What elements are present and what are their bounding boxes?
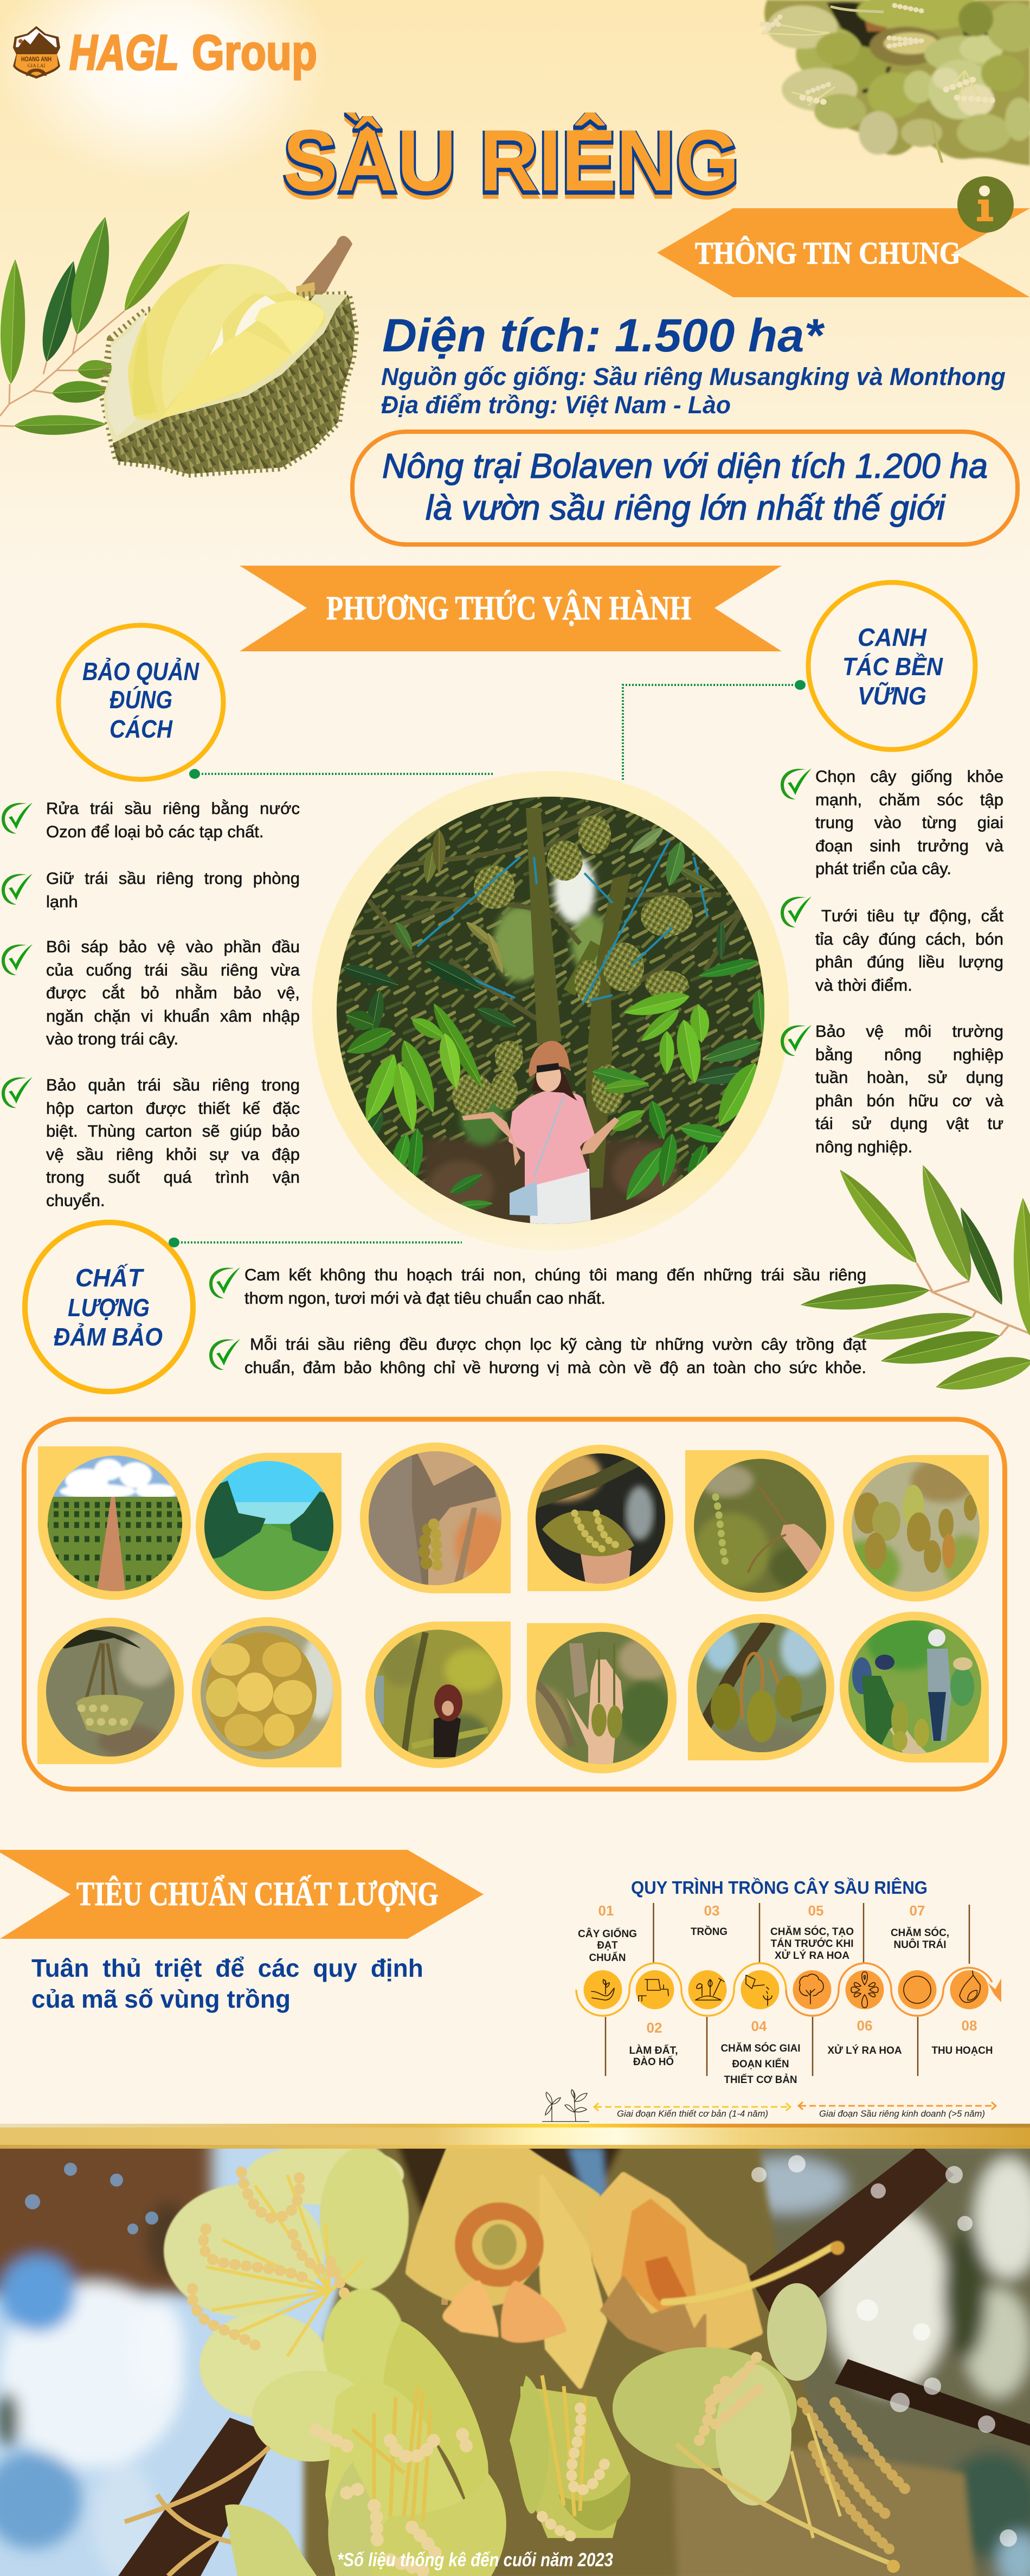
text: tưới tiêu: Tưới tiêu tự động, cắt bbox=[821, 906, 1003, 925]
illustration: durian leaves right bbox=[799, 1160, 1030, 1399]
heading: Quy trình: QUY TRÌNH TRỒNG CÂY SẦU RIÊNG bbox=[631, 1877, 928, 1898]
text: bôi sáp: Bôi sáp bảo vệ vào phần đầu bbox=[46, 937, 300, 956]
icon: info circle bbox=[957, 176, 1014, 233]
text: giữ trái: Giữ trái sầu riêng trong phòng bbox=[46, 869, 300, 888]
golden divider band bbox=[0, 2124, 1030, 2149]
text: tưới tiêu: phân đúng liều lượng bbox=[815, 952, 1003, 971]
photo ring bbox=[312, 771, 789, 1251]
panel: Chất lượng circle: ĐẢM BẢO bbox=[54, 1323, 163, 1351]
connector: right dotted line bbox=[623, 680, 806, 780]
text: bảo vệ môi trường: Bảo vệ môi trường bbox=[815, 1022, 1003, 1041]
photo card 4: buds on hand bbox=[526, 1445, 673, 1591]
text: rửa trái: Rửa trái sầu riêng bằng nước bbox=[46, 799, 300, 818]
text: bôi sáp: ngăn chặn vi khuẩn xâm nhập bbox=[46, 1007, 300, 1025]
banner: TIÊU CHUẨN CHẤT LƯỢNG bbox=[0, 1850, 484, 1939]
arrow: phase 1 bbox=[594, 2103, 790, 2111]
step labels: CHUẨN bbox=[589, 1952, 626, 1964]
text: bảo quản carton: hộp carton được thiết kế đặc bbox=[46, 1099, 300, 1117]
icon: flower bbox=[851, 1972, 878, 2008]
connector: bottom dotted line bbox=[169, 1238, 462, 1247]
photo card 8: yellow flowers bbox=[192, 1617, 342, 1767]
banner: PHƯƠNG THỨC VẬN HÀNH: PHƯƠNG THỨC VẬN HÀNH bbox=[326, 590, 691, 627]
flower: orange right bbox=[591, 2176, 845, 2370]
step numbers: 02 bbox=[647, 2020, 662, 2036]
step labels: ĐẠT bbox=[597, 1940, 618, 1951]
text: bảo quản carton bbox=[46, 1075, 300, 1210]
photo card 11: durian fruits on branch bbox=[688, 1614, 834, 1760]
illustration: durian leaves left bbox=[0, 204, 199, 435]
callout: Nông trại Bolaven bbox=[352, 432, 1018, 544]
step labels: CHĂM SÓC, bbox=[891, 1927, 949, 1939]
step labels: CÂY GIỐNG bbox=[578, 1928, 637, 1940]
text: bảo quản carton: biệt. Thùng carton sẽ giúp bảo bbox=[46, 1122, 300, 1140]
text: cam kết: Cam kết không thu hoạch trái non, chúng tôi mang đến những trái sầu riêng bbox=[244, 1265, 866, 1284]
circle label: CANH TÁC BỀN VỮNG: VỮNG bbox=[858, 682, 926, 710]
text: Tuân thủ triệt để: của mã số vùng trồng bbox=[31, 1985, 291, 2013]
icon: durian half bbox=[960, 1971, 980, 2002]
timeline: planting process bbox=[576, 1902, 1001, 2086]
photo card 2: green rows bbox=[196, 1453, 342, 1600]
text: cam kết bbox=[244, 1265, 866, 1308]
icon: durian outline bbox=[904, 1976, 931, 2003]
text: chọn cây giống: phát triển của cây. bbox=[815, 859, 951, 878]
text: tưới tiêu: tỉa cây đúng cách, bón bbox=[815, 930, 1003, 948]
step labels: NUÔI TRÁI bbox=[893, 1939, 947, 1951]
circle label: CANH TÁC BỀN VỮNG bbox=[808, 582, 975, 749]
panel: photo gallery bbox=[24, 1419, 1005, 1789]
photo card 5: hand holding buds bbox=[685, 1450, 834, 1601]
title: SẦU RIÊNG: SẦU RIÊNG bbox=[283, 112, 739, 209]
caption: phase 2: Giai đoạn Sầu riêng kinh doanh (>5 năm) bbox=[819, 2109, 985, 2119]
text: tưới tiêu: và thời điểm. bbox=[815, 975, 912, 995]
step labels: LÀM ĐẤT, bbox=[629, 2045, 678, 2056]
text: chọn cây giống: Chọn cây giống khỏe bbox=[815, 767, 1003, 786]
step labels: TÁN TRƯỚC KHI bbox=[771, 1938, 853, 1950]
text: rửa trái bbox=[46, 799, 300, 841]
photo: woman in durian orchard bbox=[331, 792, 770, 1231]
step numbers: 05 bbox=[808, 1902, 823, 1919]
icon: tree bbox=[800, 1974, 823, 2004]
text: bảo vệ môi trường: tuần hoàn, sử dụng bbox=[815, 1068, 1003, 1087]
text: bảo quản carton: chuyển. bbox=[46, 1191, 105, 1209]
icon: hand and sprout bbox=[591, 1979, 614, 2000]
step numbers: 04 bbox=[751, 2018, 767, 2034]
step labels: XỬ LÝ RA HOA bbox=[827, 2045, 902, 2056]
step numbers: 08 bbox=[962, 2017, 977, 2034]
icon: tractor bbox=[639, 1979, 668, 2001]
text: mỗi trái: Mỗi trái sầu riêng đều được chọn lọc kỹ càng từ những vườn cây trồng đạt bbox=[250, 1335, 866, 1354]
step labels: ĐÀO HỐ bbox=[633, 2056, 674, 2068]
text: Nguồn gốc giống: Nguồn gốc giống: Sầu riêng Musangking và Monthong bbox=[381, 363, 1006, 390]
step labels: TRỒNG bbox=[691, 1926, 728, 1938]
step numbers: 03 bbox=[704, 1902, 719, 1919]
step numbers bbox=[598, 1902, 977, 2036]
step labels: ĐOẠN KIẾN bbox=[732, 2058, 789, 2070]
arrow: phase 2 bbox=[799, 2102, 996, 2110]
circle label: CANH TÁC BỀN VỮNG: CANH bbox=[858, 623, 927, 651]
logo: HAGL shield bbox=[13, 26, 60, 79]
circle label: BẢO QUẢN ĐÚNG CÁCH bbox=[59, 625, 223, 779]
step labels bbox=[578, 1926, 993, 2086]
banner: THÔNG TIN CHUNG bbox=[657, 208, 1030, 297]
circle label: BẢO QUẢN ĐÚNG CÁCH: ĐÚNG bbox=[110, 685, 172, 714]
icons: green checks bbox=[2, 768, 812, 1370]
photo card 1: orchard road bbox=[38, 1446, 191, 1600]
photo card 3: trunk and flower buds bbox=[360, 1443, 511, 1593]
footnote: *Số liệu thống kê đến cuối năm 2023 bbox=[337, 2549, 613, 2571]
logo wordmark: HAGL Group: Group bbox=[192, 25, 317, 80]
text: chọn cây giống: trung vào từng giai bbox=[815, 813, 1003, 832]
flower: far right bbox=[613, 2283, 911, 2549]
circle label: CANH TÁC BỀN VỮNG: TÁC BỀN bbox=[842, 652, 943, 681]
flower: lower center bbox=[252, 2321, 630, 2576]
step labels: THIẾT CƠ BẢN bbox=[724, 2074, 797, 2086]
logo wordmark: HAGL Group bbox=[69, 25, 317, 80]
text: tưới tiêu bbox=[815, 906, 1004, 995]
photo: durian flowers background bbox=[0, 2131, 1030, 2576]
text: bảo vệ môi trường: tái sử dụng vật tư bbox=[815, 1114, 1003, 1133]
text: bảo vệ môi trường: nông nghiệp. bbox=[815, 1137, 912, 1156]
banner: PHƯƠNG THỨC VẬN HÀNH bbox=[240, 566, 782, 651]
callout: Nông trại Bolaven: là vườn sầu riêng lớn nhất thế giới bbox=[426, 488, 946, 527]
text: giữ trái: lạnh bbox=[46, 892, 78, 911]
text: bảo quản carton: vệ sầu riêng khỏi sự va đập bbox=[46, 1144, 300, 1164]
text: bảo vệ môi trường bbox=[815, 1022, 1004, 1156]
step labels: CHĂM SÓC, TẠO bbox=[770, 1926, 854, 1938]
text: mỗi trái bbox=[244, 1335, 866, 1377]
text: giữ trái bbox=[46, 869, 300, 911]
title: SẦU RIÊNG: SẦU RIÊNG bbox=[283, 114, 739, 211]
connector: left dotted line bbox=[189, 769, 494, 779]
photo card 6: young fruits bbox=[835, 1455, 989, 1601]
text: Địa điểm trồng: Địa điểm trồng: Việt Nam - Lào bbox=[381, 391, 731, 419]
circle label: BẢO QUẢN ĐÚNG CÁCH: BẢO QUẢN bbox=[82, 657, 199, 685]
panel: Chất lượng circle bbox=[25, 1222, 193, 1392]
page background bbox=[0, 0, 1030, 569]
text: bảo vệ môi trường: bằng nông nghiệp bbox=[815, 1045, 1003, 1064]
step numbers: 01 bbox=[598, 1902, 614, 1919]
photo card 12: workers harvesting bbox=[840, 1612, 989, 1763]
text: rửa trái: Ozon để loại bỏ các tạp chất. bbox=[46, 822, 264, 841]
photo card 7: hanging buds bbox=[37, 1618, 184, 1764]
flower: orange center bbox=[409, 2149, 604, 2386]
illustration: durian fruit bbox=[103, 236, 355, 474]
text: bảo quản carton: trong suốt quá trình vận bbox=[46, 1168, 300, 1187]
circle label: BẢO QUẢN ĐÚNG CÁCH: CÁCH bbox=[110, 715, 173, 743]
caption: phase 1: Giai đoạn Kiến thiết cơ bản (1-4 năm) bbox=[617, 2109, 768, 2119]
text: bảo quản carton: Bảo quản trái sầu riêng trong bbox=[46, 1075, 300, 1094]
icon: plant and shovel bbox=[696, 1978, 724, 2000]
text: chọn cây giống: đoạn sinh trưởng và bbox=[815, 836, 1003, 855]
text: mỗi trái: chuẩn, đảm bảo không chỉ về hương vị mà còn về độ an toàn cho sức khỏe. bbox=[244, 1358, 866, 1376]
text: bôi sáp: được cắt bỏ nhằm bảo vệ, bbox=[46, 983, 300, 1002]
icon: durian flower cluster top right bbox=[762, 0, 1030, 165]
step numbers: 06 bbox=[857, 2017, 872, 2034]
panel: Chất lượng circle: CHẤT bbox=[75, 1264, 145, 1292]
text: chọn cây giống bbox=[815, 767, 1004, 878]
step numbers: 07 bbox=[910, 1902, 925, 1919]
icon: sprouts bbox=[542, 2090, 589, 2122]
title: SẦU RIÊNG: SẦU RIÊNG bbox=[283, 118, 739, 215]
text: chọn cây giống: mạnh, chăm sóc tập bbox=[815, 790, 1003, 809]
banner: TIÊU CHUẨN CHẤT LƯỢNG: TIÊU CHUẨN CHẤT LƯỢNG bbox=[76, 1875, 439, 1913]
text: Tuân thủ triệt để bbox=[31, 1954, 423, 2013]
photo card 10: baby durians in hand bbox=[515, 1623, 677, 1773]
callout: Nông trại Bolaven: Nông trại Bolaven với diện tích 1.200 ha bbox=[382, 446, 988, 485]
text: cam kết: thơm ngon, tươi mới và đạt tiêu chuẩn cao nhất. bbox=[244, 1289, 606, 1307]
banner: THÔNG TIN CHUNG: THÔNG TIN CHUNG bbox=[695, 235, 961, 271]
logo: HAGL shield: HOANG ANH bbox=[21, 55, 52, 63]
panel: Chất lượng circle: LƯỢNG bbox=[68, 1293, 150, 1322]
text: bôi sáp: của cuống trái sầu riêng vừa bbox=[46, 960, 300, 979]
text: bôi sáp: vào trong trái cây. bbox=[46, 1029, 178, 1048]
photo card 9: worker in tree bbox=[365, 1622, 511, 1768]
text: bôi sáp bbox=[46, 937, 300, 1048]
text: Tuân thủ triệt để: Tuân thủ triệt để các quy định bbox=[31, 1954, 423, 1982]
step labels: CHĂM SÓC GIAI bbox=[721, 2042, 800, 2054]
logo wordmark: HAGL Group: HAGL bbox=[69, 25, 179, 80]
stat: Diện tích: Diện tích: 1.500 ha* bbox=[382, 310, 825, 362]
step labels: XỬ LÝ RA HOA bbox=[775, 1950, 849, 1962]
text: bảo vệ môi trường: phân bón hữu cơ và bbox=[815, 1091, 1003, 1110]
flower: upper left bbox=[164, 2144, 409, 2419]
step labels: THU HOẠCH bbox=[931, 2045, 993, 2056]
logo: HAGL shield: GIA LAI bbox=[28, 63, 45, 68]
icon: watering can bbox=[746, 1975, 772, 2005]
